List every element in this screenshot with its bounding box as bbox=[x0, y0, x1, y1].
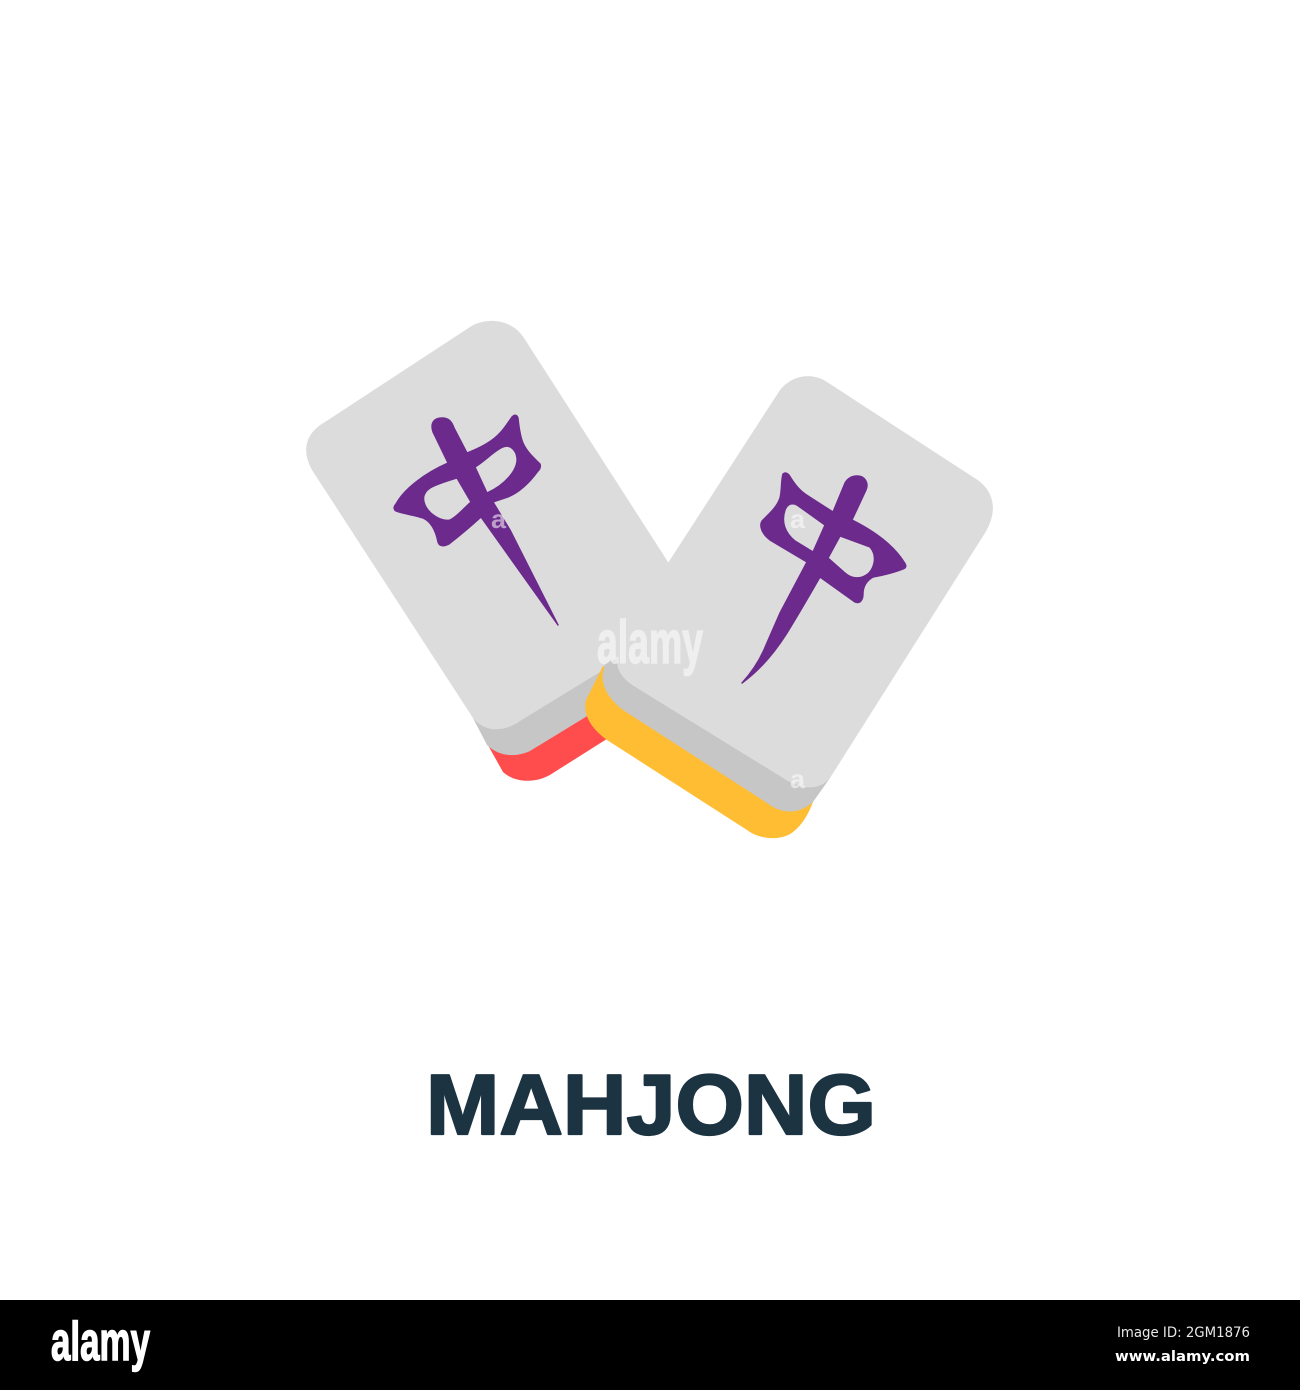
footer image id: Image ID: 2GM1876 bbox=[1117, 1325, 1250, 1341]
tile base: yellow bbox=[585, 666, 813, 838]
watermark: alamy centre: alamy bbox=[597, 609, 703, 676]
watermark: small a on right glyph: a bbox=[790, 504, 806, 534]
tile base: red bbox=[484, 700, 610, 781]
tile glyph: purple character bbox=[394, 415, 558, 625]
watermark: small a on left glyph: a bbox=[491, 504, 507, 534]
tile glyph: purple character bbox=[742, 473, 906, 683]
tile face bbox=[306, 321, 680, 729]
footer bar bbox=[0, 1300, 1300, 1390]
footer logo: alamy: alamy bbox=[51, 1310, 150, 1372]
title: MAHJONG bbox=[426, 1058, 876, 1153]
footer website: www.alamy.com bbox=[1115, 1349, 1250, 1365]
icon: left mahjong tile bbox=[306, 321, 680, 781]
tile side: grey bbox=[473, 665, 625, 755]
tile face bbox=[617, 376, 993, 787]
tile side: grey bbox=[603, 650, 830, 812]
watermark: small a on lower right tile: a bbox=[790, 764, 806, 794]
icon: right mahjong tile bbox=[585, 376, 993, 838]
